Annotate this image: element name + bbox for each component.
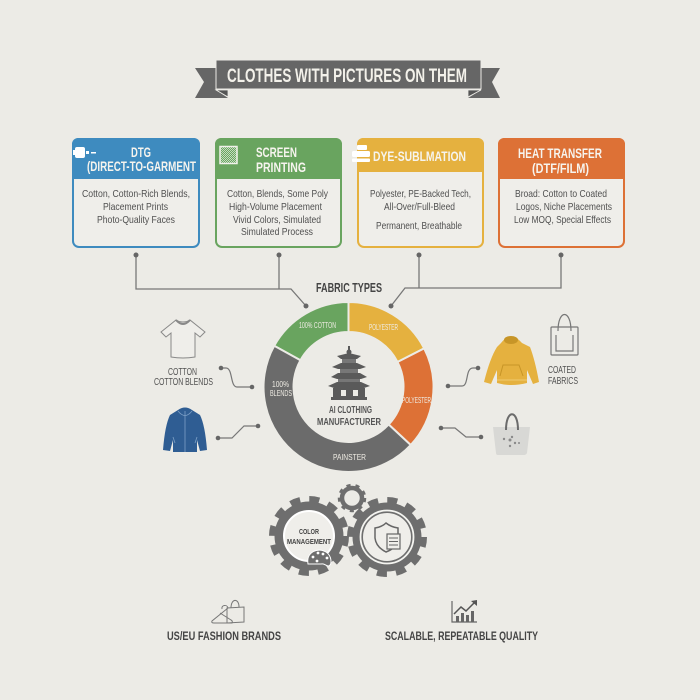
- DTG text: Photo-Quality Faces: [97, 214, 175, 226]
- icon: print head: [73, 147, 96, 158]
- label: cotton: COTTON: [168, 366, 197, 378]
- DTG heading: [87, 144, 196, 174]
- dye-sublimation heading: DYE-SUBLMATION: [373, 148, 466, 164]
- label: cotton: COTTON BLENDS: [154, 376, 213, 388]
- gear: color management: [272, 500, 346, 572]
- heat transfer text: Broad: Cotton to Coated: [515, 188, 607, 200]
- dye-sublimation text: All-Over/Full-Bleed: [384, 201, 455, 213]
- screen printing text: Simulated Process: [241, 226, 313, 238]
- screen printing heading: [256, 144, 306, 175]
- DTG text: [82, 188, 190, 226]
- donut chart: fabric types: [264, 302, 434, 472]
- heat transfer heading: HEAT TRANSFER: [518, 145, 602, 161]
- connector: tote: [439, 426, 483, 439]
- gears: [272, 486, 424, 574]
- screen printing text: [227, 188, 329, 238]
- icon: hanger and shopping bag: [212, 600, 244, 623]
- icon: outline bag: [551, 314, 578, 355]
- small gear: [340, 486, 364, 510]
- gear: quality shield: [350, 500, 424, 574]
- centre label: MANUFACTURER: [317, 416, 381, 428]
- DTG heading: DTG: [131, 144, 151, 160]
- panel: screen printing: [215, 138, 342, 247]
- gear label: [287, 527, 331, 546]
- icon: pagoda: [328, 346, 370, 400]
- icon: printed tote: [493, 414, 530, 455]
- segment: polyester yellow: [348, 302, 424, 362]
- screen printing heading: SCREEN: [256, 144, 297, 160]
- segment: polyester orange: [389, 348, 434, 445]
- dye-sublimation text: Permanent, Breathable: [376, 220, 462, 232]
- icon: shield and document: [375, 523, 400, 552]
- heat transfer heading: [518, 145, 602, 176]
- DTG text: Cotton, Cotton-Rich Blends,: [82, 188, 190, 200]
- title text: CLOTHES WITH PICTURES ON THEM: [227, 66, 467, 87]
- donut labels: POLYESTER: [402, 396, 431, 405]
- label: coated fabrics: FABRICS: [548, 375, 578, 387]
- heat transfer text: Logos, Niche Placements: [516, 201, 612, 213]
- label: coated fabrics: COATED: [548, 364, 576, 376]
- segment: blends grey: [264, 346, 411, 472]
- donut labels: 100%: [272, 380, 289, 389]
- label: coated fabrics: [548, 364, 578, 387]
- heat transfer text: [514, 188, 612, 226]
- panel: dye-sublimation: [352, 138, 484, 247]
- icon: growth chart: [452, 600, 477, 622]
- donut labels: POLYESTER: [369, 323, 398, 332]
- screen printing text: High-Volume Placement: [229, 201, 322, 213]
- icon: heat press: [352, 145, 370, 162]
- screen printing text: Cotton, Blends, Some Poly: [227, 188, 329, 200]
- panel: DTG: [72, 138, 200, 247]
- label: scalable quality: SCALABLE, REPEATABLE QUALITY: [385, 629, 538, 643]
- DTG heading: (DIRECT-TO-GARMENT: [87, 158, 196, 174]
- gear label: MANAGEMENT: [287, 537, 331, 546]
- heat transfer text: Low MOQ, Special Effects: [514, 214, 611, 226]
- icon: palette: [308, 550, 331, 566]
- icon: blue jacket: [163, 408, 207, 452]
- connector: cotton: [219, 366, 254, 389]
- label: us/eu fashion brands: US/EU FASHION BRANDS: [167, 629, 281, 643]
- title banner: [195, 60, 500, 98]
- connector: hoodie: [446, 366, 480, 388]
- connector: jacket: [216, 424, 260, 440]
- panel: heat transfer: [498, 138, 625, 247]
- connectors: cards to fabric wheel: [134, 252, 564, 308]
- label: cotton: [154, 366, 213, 388]
- DTG text: Placement Prints: [103, 201, 168, 213]
- segment: 100% cotton: [274, 302, 348, 360]
- icon: mesh screen: [220, 146, 237, 164]
- centre label: [317, 404, 381, 428]
- heading: fabric types: FABRIC TYPES: [316, 280, 382, 295]
- gear label: COLOR: [299, 527, 319, 536]
- screen printing text: Vivid Colors, Simulated: [233, 214, 321, 226]
- donut labels: BLENDS: [270, 389, 292, 398]
- donut labels: 100% COTTON: [299, 321, 336, 330]
- donut labels: PAINSTER: [333, 453, 366, 462]
- centre label: AI CLOTHING: [329, 404, 372, 416]
- donut labels: [270, 321, 431, 462]
- screen printing heading: PRINTING: [256, 159, 306, 175]
- heat transfer heading: (DTF/FILM): [532, 160, 589, 176]
- icon: yellow hoodie: [484, 336, 539, 385]
- dye-sublimation text: [370, 188, 471, 232]
- icon: t-shirt: [161, 320, 205, 358]
- dye-sublimation text: Polyester, PE-Backed Tech,: [370, 188, 471, 200]
